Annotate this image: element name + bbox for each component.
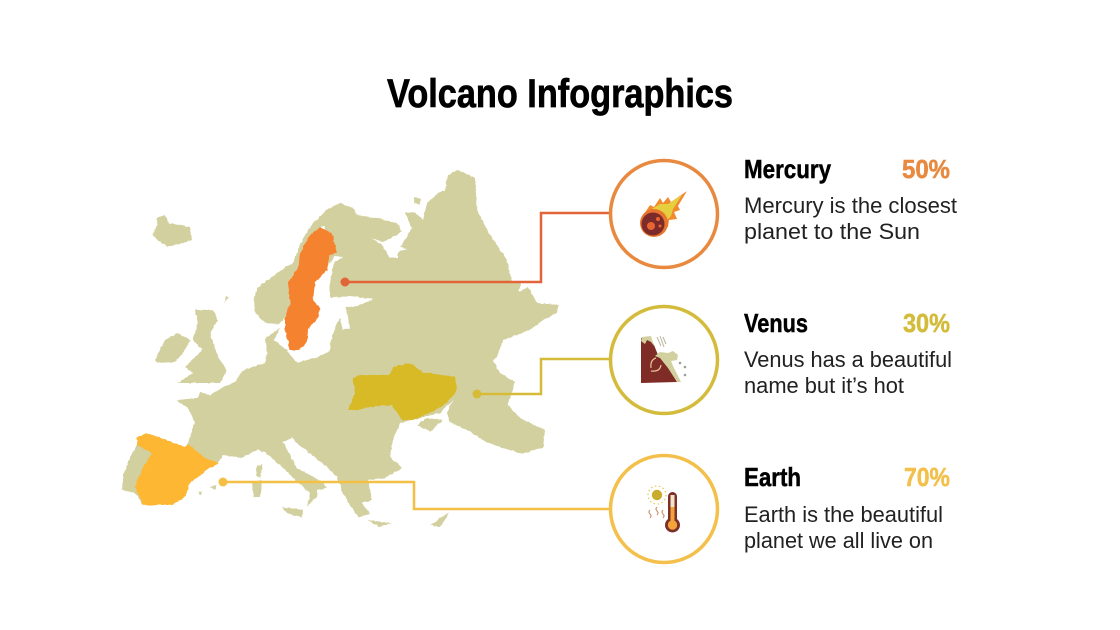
text block: Mercury: Mercury is the closest [744, 193, 957, 218]
text block: Venus: 30% [903, 308, 950, 338]
circle: Mercury [610, 160, 718, 268]
connector: Earth [218, 478, 611, 509]
text block: Mercury [744, 154, 957, 244]
map of Europe [122, 170, 558, 527]
Sweden highlight [285, 227, 337, 350]
text block: Earth: 70% [904, 462, 950, 492]
text block: Venus: Venus has a beautiful [744, 347, 952, 372]
connector: Venus [472, 359, 611, 398]
text block: Venus [744, 308, 952, 398]
text block: Mercury: 50% [902, 154, 950, 184]
text block: Earth [744, 462, 950, 553]
text block: Earth: Earth is the beautiful [744, 502, 943, 527]
text block: Earth: planet we all live on [744, 528, 933, 553]
circle: Earth [610, 456, 718, 562]
Ukraine highlight [348, 363, 457, 420]
connector: Mercury [340, 213, 611, 286]
text block: Earth: Earth [744, 462, 801, 492]
seas cut from the map [287, 228, 412, 362]
title: Volcano Infographics [387, 72, 733, 116]
text block: Mercury: planet to the Sun [744, 219, 920, 244]
icon: thermometer and sun [648, 486, 680, 532]
text block: Venus: Venus [744, 308, 808, 338]
text block: Venus: name but it’s hot [744, 373, 904, 398]
text block: Mercury: Mercury [744, 154, 831, 184]
Spain highlight [135, 433, 219, 505]
icon: landslide [641, 336, 686, 383]
icon: comet [640, 191, 687, 237]
circle: Venus [610, 306, 718, 414]
